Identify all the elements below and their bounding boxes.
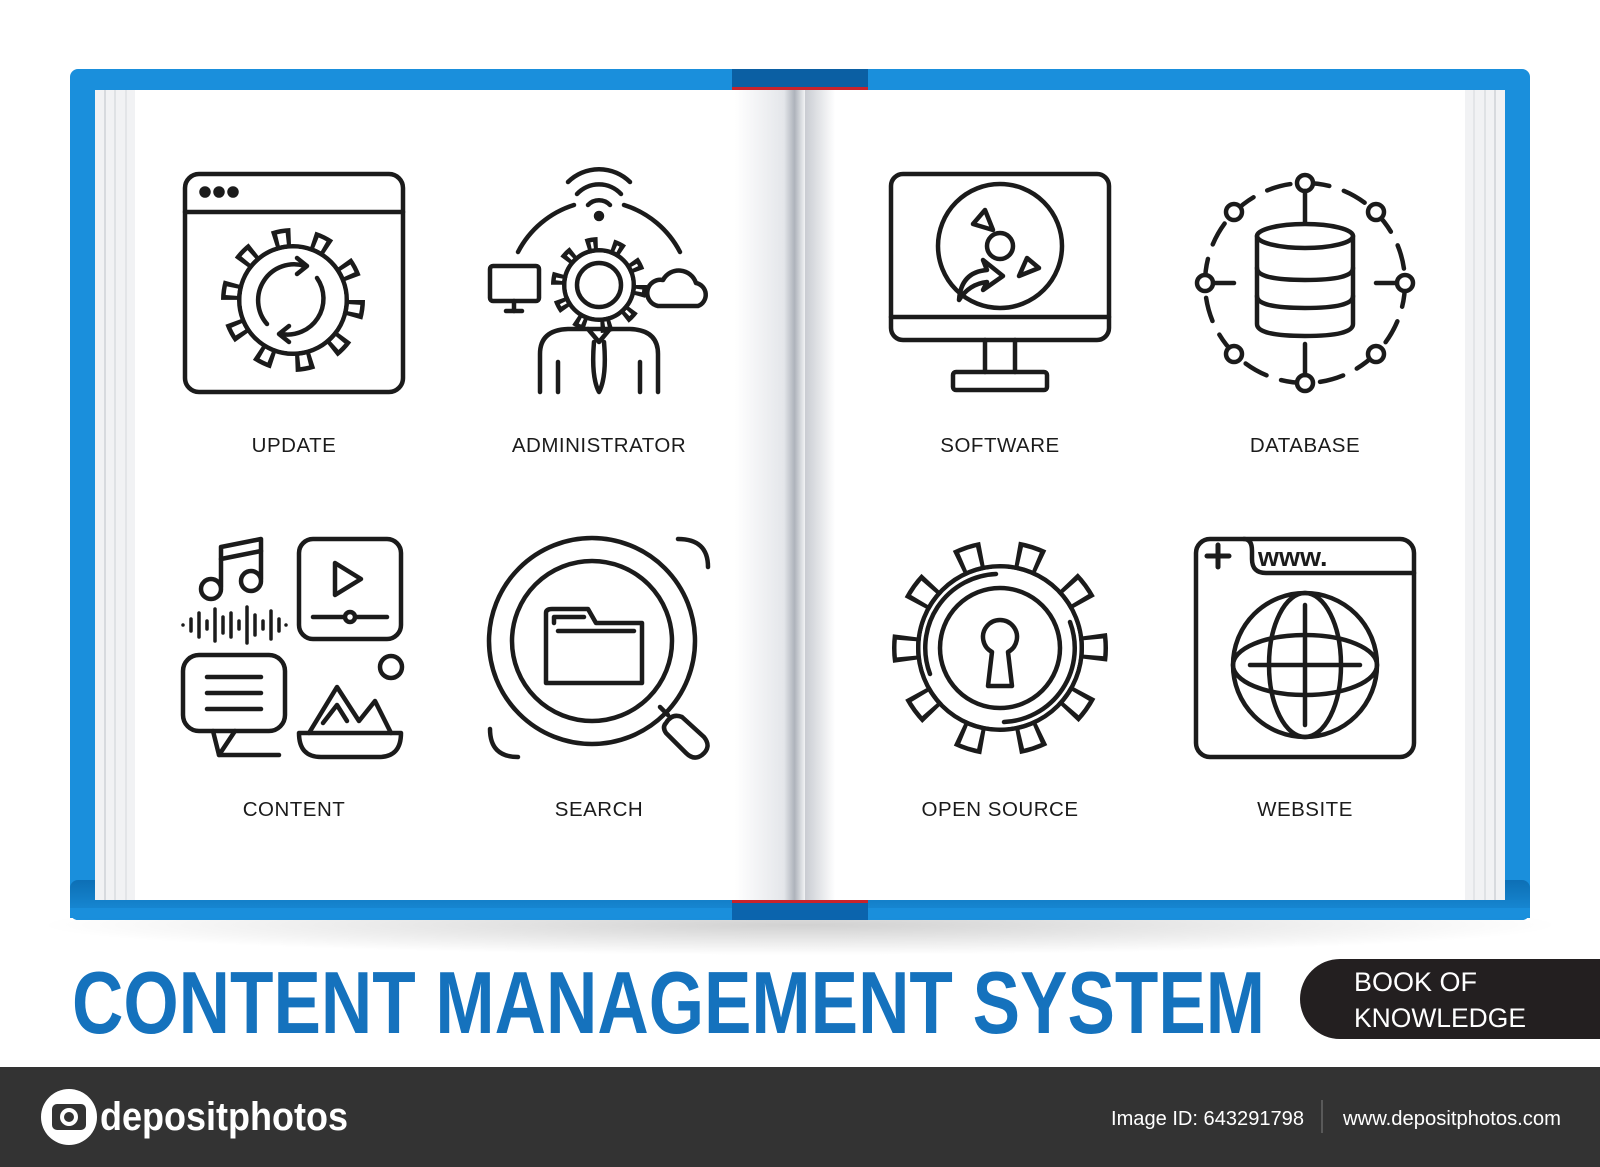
title: CONTENT MANAGEMENT SYSTEM [72,953,1265,1052]
footer logo: depositphotos [100,1095,348,1139]
label: software: SOFTWARE [940,434,1060,457]
icon: website [1196,539,1414,757]
label: administrator: ADMINISTRATOR [512,434,686,457]
label: database: DATABASE [1250,434,1360,457]
badge: book of knowledge: BOOK OF [1354,967,1477,997]
icon: website: www. [1257,542,1328,572]
footer image id: Image ID: 643291798 [1111,1108,1304,1130]
icon: administrator [490,169,706,392]
icon: update [185,174,403,392]
footer url: www.depositphotos.com [1342,1108,1561,1130]
icon: search [489,538,708,758]
icon: content [183,539,402,757]
book [70,69,1530,920]
labels [243,434,1360,821]
label: update: UPDATE [252,434,336,457]
badge: book of knowledge [1300,959,1600,1039]
label: open source: OPEN SOURCE [922,798,1078,821]
label: website: WEBSITE [1257,798,1353,821]
icon: database [1197,175,1413,391]
footer logo [41,1089,348,1145]
label: search: SEARCH [555,798,643,821]
label: content: CONTENT [243,798,345,821]
footer [0,1067,1600,1167]
icon: software [891,174,1109,390]
icon: open source [894,542,1106,754]
badge: book of knowledge: KNOWLEDGE [1354,1003,1526,1033]
book shadow [40,895,1560,955]
